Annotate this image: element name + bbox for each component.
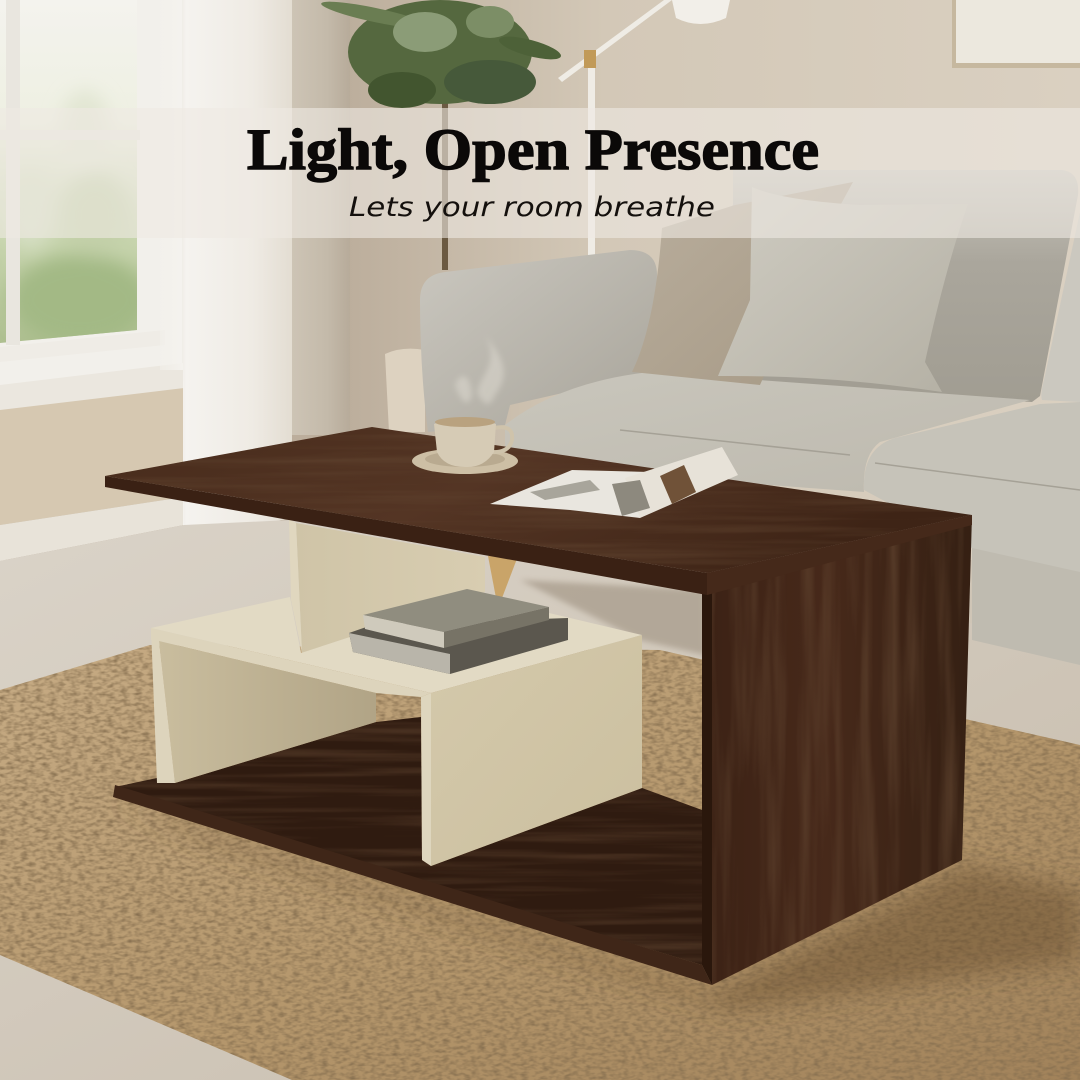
floor shadow under sofa xyxy=(520,580,705,655)
steam xyxy=(455,335,504,404)
bottom board xyxy=(110,710,712,985)
planter xyxy=(385,349,425,432)
cream left edge xyxy=(151,628,175,783)
cream front edge xyxy=(421,693,431,866)
plant xyxy=(320,0,563,270)
back wall xyxy=(0,0,1080,560)
seat piping xyxy=(620,430,850,455)
lower wall and skirting xyxy=(0,388,184,561)
table top xyxy=(100,425,980,595)
sofa seat cushion xyxy=(505,372,1030,492)
floor xyxy=(0,520,1080,1080)
sofa back cushion xyxy=(700,170,1078,402)
sofa base xyxy=(860,480,1080,665)
back pillow xyxy=(632,182,853,385)
subtitle: Lets your room breathe xyxy=(349,192,715,223)
cream front panel xyxy=(431,635,642,866)
cream left inner panel xyxy=(159,641,376,783)
sofa side cushion xyxy=(864,402,1080,572)
table shadow on rug xyxy=(112,800,1080,1010)
sofa xyxy=(420,170,1080,665)
sofa leg xyxy=(488,556,518,598)
title: Light, Open Presence xyxy=(247,117,819,182)
jute rug xyxy=(0,640,1080,1080)
upright lit edge xyxy=(289,519,302,653)
side cushion piping xyxy=(875,463,1080,490)
floor lamp xyxy=(558,0,730,255)
cream shelf front edge xyxy=(151,628,431,697)
coffee cup and saucer xyxy=(412,417,518,474)
framed picture xyxy=(952,0,1080,68)
cream rear upright xyxy=(296,523,485,653)
translucent title band xyxy=(0,108,1080,238)
coffee table xyxy=(100,335,980,990)
right side panel xyxy=(700,510,980,990)
window xyxy=(0,0,184,411)
front pillow xyxy=(718,187,968,392)
stacked books xyxy=(349,589,568,674)
sheer curtain xyxy=(160,0,292,528)
sofa left arm xyxy=(420,250,657,432)
sofa right arm xyxy=(1041,212,1080,402)
magazine xyxy=(490,447,738,518)
cream upper shelf xyxy=(151,597,642,693)
beige curtain xyxy=(292,0,350,435)
